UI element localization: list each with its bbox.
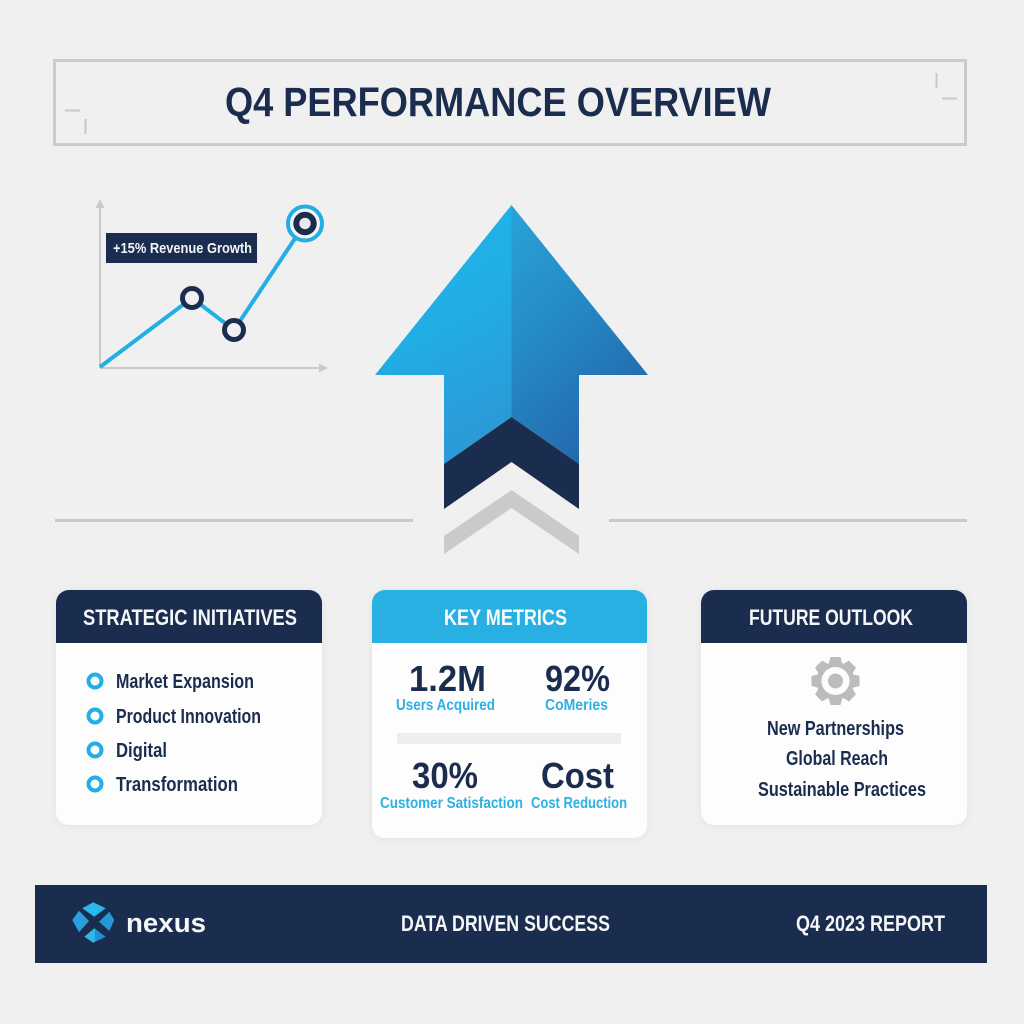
report label: Q4 2023 REPORT [796, 911, 945, 936]
list: initiatives [88, 671, 261, 796]
list: outlook items: New Partnerships [767, 718, 904, 740]
icon: gear [812, 657, 860, 705]
list: initiatives: Digital [116, 740, 167, 762]
metric: users acquired [396, 658, 495, 714]
big growth arrow [375, 205, 648, 554]
panel: strategic initiatives [56, 590, 322, 825]
title banner: Q4 PERFORMANCE OVERVIEW [225, 79, 771, 125]
callout: revenue growth [106, 233, 257, 263]
title banner [54, 60, 966, 144]
brand name: nexus [126, 908, 206, 938]
panel: future outlook [701, 590, 967, 825]
metric: cost reduction: Cost [541, 755, 614, 796]
metric: customer satisfaction: Customer Satisfaction [380, 795, 523, 812]
metric: comeries [545, 658, 610, 714]
footer bar [35, 885, 987, 963]
line chart: revenue growth [96, 199, 328, 372]
list: initiatives: Transformation [116, 774, 238, 796]
metric: users acquired: Users Acquired [396, 697, 495, 714]
list: initiatives: Product Innovation [116, 706, 261, 728]
list: outlook items: Sustainable Practices [758, 779, 926, 801]
list: outlook items: Global Reach [786, 748, 888, 770]
icon: nexus logo [72, 902, 114, 943]
panel: future outlook: FUTURE OUTLOOK [749, 605, 913, 630]
metric: comeries: CoMeries [545, 697, 608, 714]
metric: customer satisfaction [380, 755, 523, 812]
panel: strategic initiatives: STRATEGIC INITIATIVES [83, 605, 297, 630]
list: outlook items [758, 718, 926, 801]
section divider lines [55, 519, 967, 522]
panel: key metrics: KEY METRICS [444, 605, 567, 630]
callout: revenue growth: +15% Revenue Growth [113, 240, 252, 257]
metric: users acquired: 1.2M [409, 658, 486, 699]
list: initiatives: Market Expansion [116, 671, 254, 693]
panel: key metrics [372, 590, 647, 838]
metric: cost reduction: Cost Reduction [531, 795, 627, 812]
metric: cost reduction [531, 755, 627, 812]
metric: comeries: 92% [545, 658, 610, 699]
tagline: DATA DRIVEN SUCCESS [401, 911, 610, 936]
metric: customer satisfaction: 30% [412, 755, 478, 796]
